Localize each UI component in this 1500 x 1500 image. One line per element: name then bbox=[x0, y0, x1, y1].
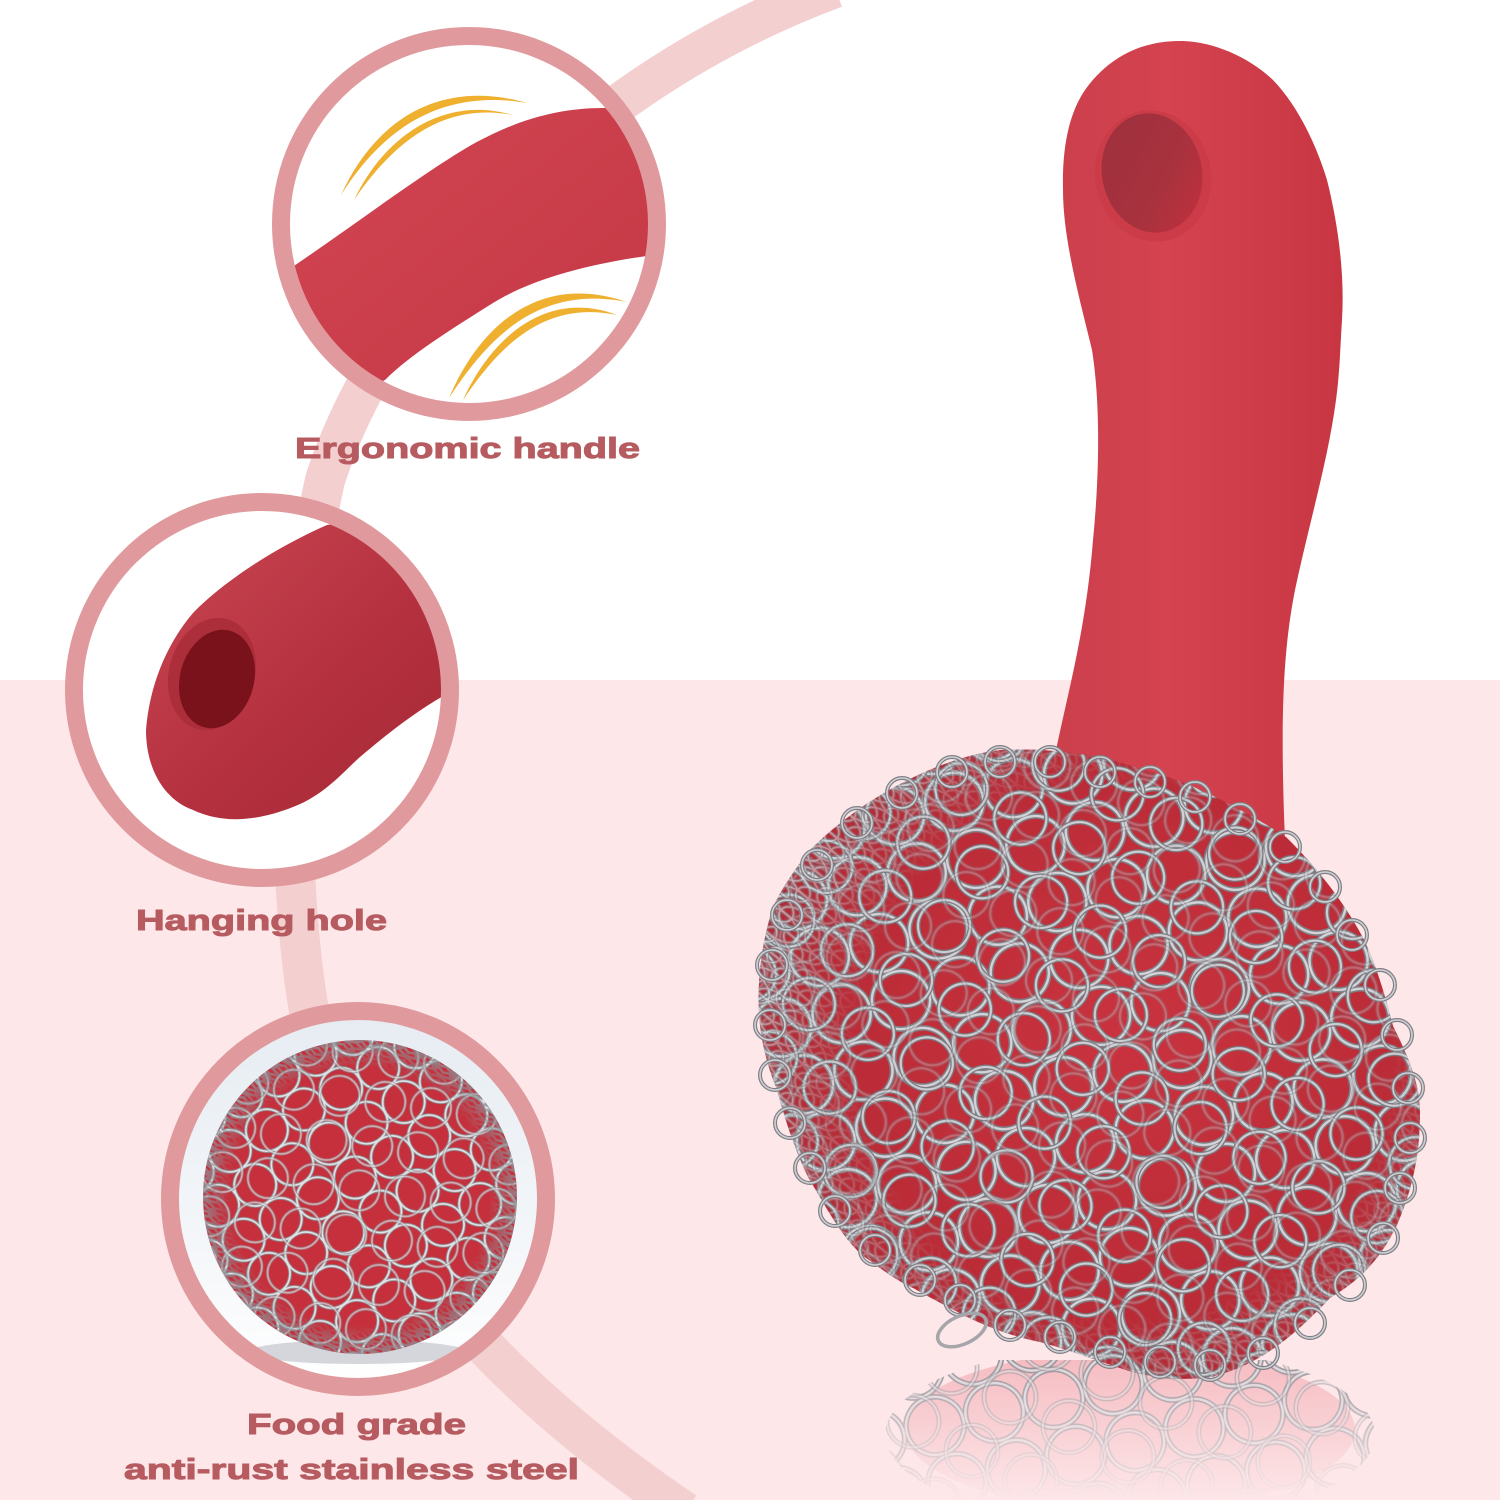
label: food grade: Food grade bbox=[247, 1409, 466, 1441]
handle close-up bbox=[294, 108, 648, 381]
hanging hole bbox=[1083, 99, 1223, 253]
callout: ergonomic handle bbox=[281, 36, 670, 420]
chainmail ball bbox=[740, 740, 1440, 1400]
reflection of mesh bbox=[886, 1360, 1374, 1488]
ground shadow bbox=[248, 1340, 468, 1364]
handle bbox=[1050, 41, 1343, 840]
mesh ball close-up bbox=[200, 1040, 520, 1360]
callout: hanging hole bbox=[74, 500, 500, 878]
label: ergonomic handle: Ergonomic handle bbox=[295, 433, 640, 465]
product: scrubber with handle and chainmail ball bbox=[740, 41, 1440, 1500]
decorative large arc bbox=[293, 0, 835, 1500]
flex lines bbox=[341, 96, 627, 400]
hole bbox=[168, 618, 256, 730]
handle tip close-up bbox=[146, 524, 441, 820]
outline rings bbox=[755, 747, 1425, 1380]
steel ring layers bbox=[740, 740, 1440, 1400]
callout: stainless steel mesh bbox=[170, 1011, 546, 1387]
label: anti-rust stainless steel: anti-rust stainless steel bbox=[124, 1454, 579, 1486]
loose ring bbox=[933, 1306, 991, 1354]
rubber core bbox=[740, 740, 1440, 1400]
pink lower background bbox=[0, 680, 1500, 1500]
label: hanging hole: Hanging hole bbox=[136, 905, 387, 937]
dense edge rings bbox=[740, 740, 1440, 1400]
